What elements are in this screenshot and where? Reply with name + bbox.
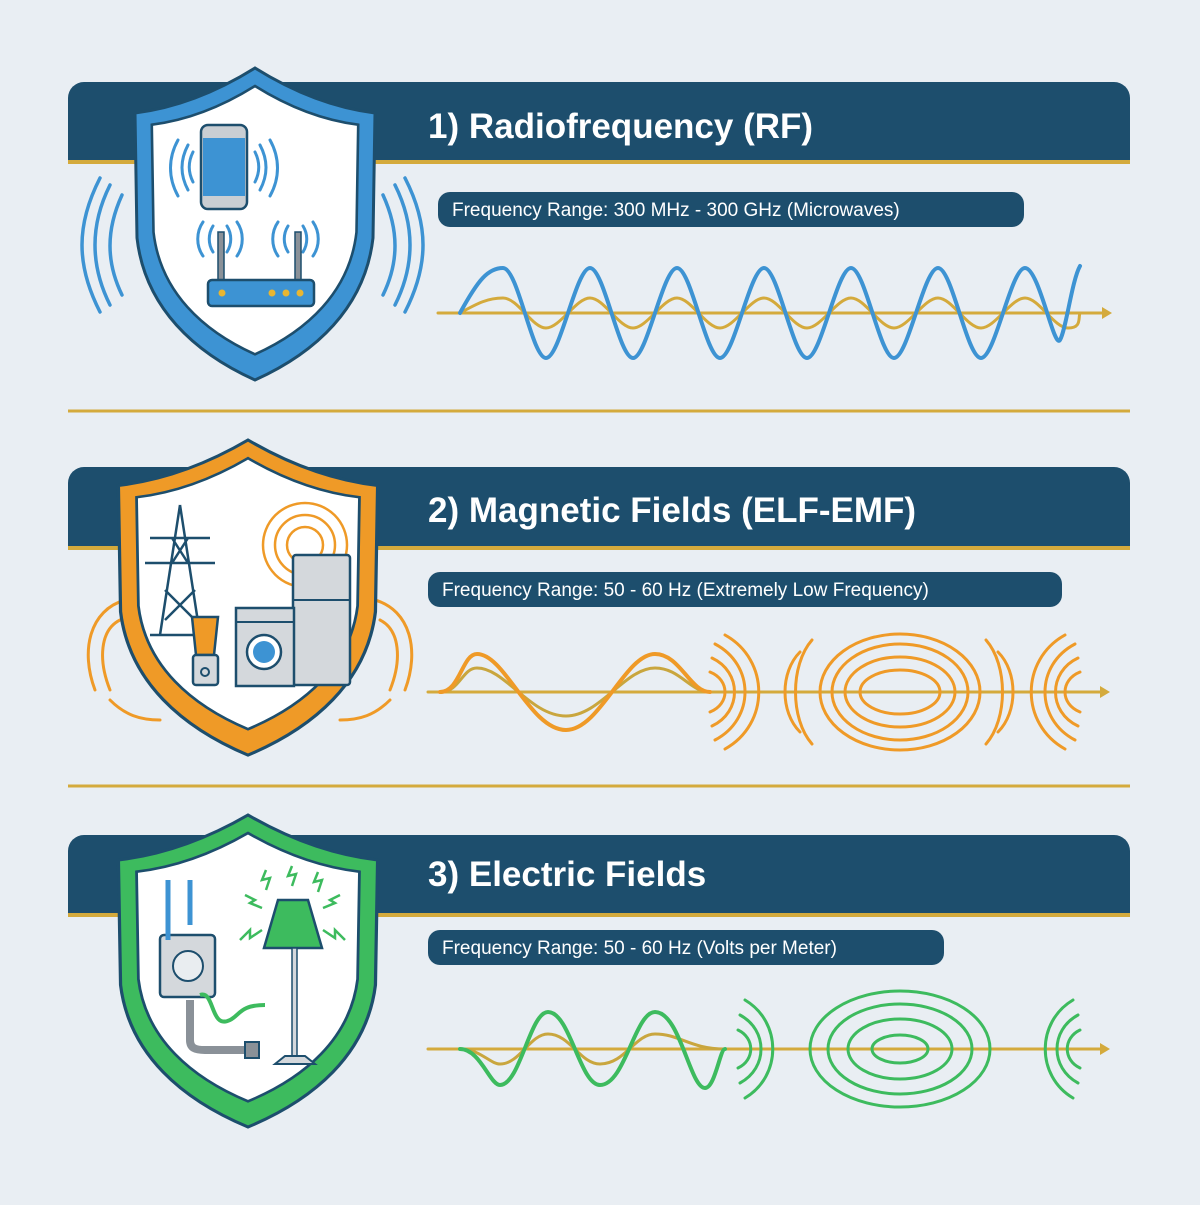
icon: power tower xyxy=(145,505,215,635)
banner 2 xyxy=(68,467,1130,550)
icon: router xyxy=(208,232,314,306)
icon: phone xyxy=(201,125,247,209)
panel: electric fields xyxy=(68,815,1130,1127)
pill 1: Frequency Range: 300 MHz - 300 GHz (Microwaves) xyxy=(452,200,900,221)
pill 3: Frequency Range: 50 - 60 Hz (Volts per Meter) xyxy=(442,938,837,959)
title 1: 1) Radiofrequency (RF) xyxy=(428,107,813,146)
icon: washing machine xyxy=(236,608,294,686)
icon: shield electric xyxy=(118,815,378,1127)
icon: fridge xyxy=(293,555,350,685)
pill 2 xyxy=(428,572,1062,607)
icon: outlet xyxy=(160,880,265,1058)
icon: lamp xyxy=(240,866,345,1064)
panel: magnetic fields xyxy=(68,440,1130,755)
chart: magnetic wave xyxy=(428,634,1110,750)
panel: radiofrequency xyxy=(68,68,1130,380)
title 2: 2) Magnetic Fields (ELF-EMF) xyxy=(428,491,916,530)
pill 3 xyxy=(428,930,944,965)
icon: blender xyxy=(192,617,218,685)
pill 1 xyxy=(438,192,1024,227)
banner 1 xyxy=(68,82,1130,164)
icon: shield RF xyxy=(82,68,423,380)
icon: shield magnetic xyxy=(88,440,412,755)
title 3: 3) Electric Fields xyxy=(428,855,706,894)
banner 3 xyxy=(68,835,1130,917)
chart: RF wave xyxy=(438,266,1112,358)
chart: electric wave xyxy=(428,991,1110,1107)
pill 2: Frequency Range: 50 - 60 Hz (Extremely Low Frequency) xyxy=(442,580,929,601)
